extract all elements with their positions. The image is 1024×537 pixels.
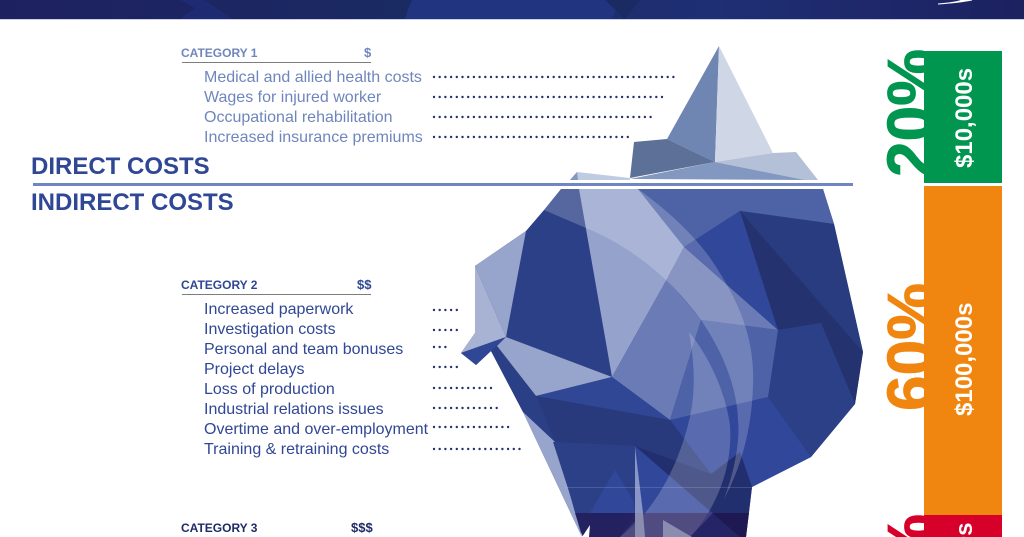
panel: category 3 header bbox=[181, 520, 373, 535]
panel: category 3 header: CATEGORY 3 bbox=[181, 521, 257, 535]
category 2 header: $$ bbox=[357, 277, 371, 292]
panel: category 2 bbox=[181, 277, 428, 458]
iceberg body below waterline bbox=[461, 189, 863, 537]
category 1 items: Increased insurance premiums bbox=[204, 129, 423, 146]
amount: $100,000s: $100,000s bbox=[951, 303, 978, 416]
translucent arcs bbox=[544, 189, 753, 537]
category 2 header: CATEGORY 2 bbox=[181, 278, 257, 292]
category 2 items: Training & retraining costs bbox=[204, 441, 389, 458]
category 2 items: Overtime and over-employment bbox=[204, 421, 428, 438]
ice sliver bbox=[635, 447, 643, 513]
category 1 header bbox=[181, 45, 371, 60]
category 1 items: Wages for injured worker bbox=[204, 89, 381, 106]
iceberg tip above waterline bbox=[570, 46, 818, 180]
heading: indirect costs: INDIRECT COSTS bbox=[31, 189, 234, 216]
category 2 header bbox=[181, 277, 372, 292]
category 1 header: CATEGORY 1 bbox=[181, 46, 257, 60]
category 2 items: Industrial relations issues bbox=[204, 401, 384, 418]
amount: $10,000s: $10,000s bbox=[951, 68, 978, 168]
category 2 items: Loss of production bbox=[204, 381, 335, 398]
category 1 items: Medical and allied health costs bbox=[204, 69, 422, 86]
category 1 items: Occupational rehabilitation bbox=[204, 109, 393, 126]
bar: orange bbox=[924, 186, 1002, 515]
percentage: 60%: 60% bbox=[874, 283, 946, 411]
header band bbox=[0, 0, 1024, 20]
heading: direct costs: DIRECT COSTS bbox=[31, 153, 210, 180]
panel: category 1 bbox=[181, 45, 423, 146]
category 1 header: $ bbox=[364, 45, 371, 60]
category 2 items: Investigation costs bbox=[204, 321, 336, 338]
panel: category 3 header: $$$ bbox=[351, 520, 373, 535]
category 2 items: Personal and team bonuses bbox=[204, 341, 403, 358]
bar: green bbox=[924, 51, 1002, 183]
bottom dark water band bbox=[575, 513, 749, 537]
percentage: 20%: 20% bbox=[874, 49, 946, 177]
bar: red bbox=[924, 515, 1002, 537]
category 1 items bbox=[204, 69, 423, 146]
category 2 items bbox=[204, 301, 428, 458]
category 2 items: Project delays bbox=[204, 361, 304, 378]
category 2 items: Increased paperwork bbox=[204, 301, 353, 318]
waterline bbox=[33, 183, 853, 186]
